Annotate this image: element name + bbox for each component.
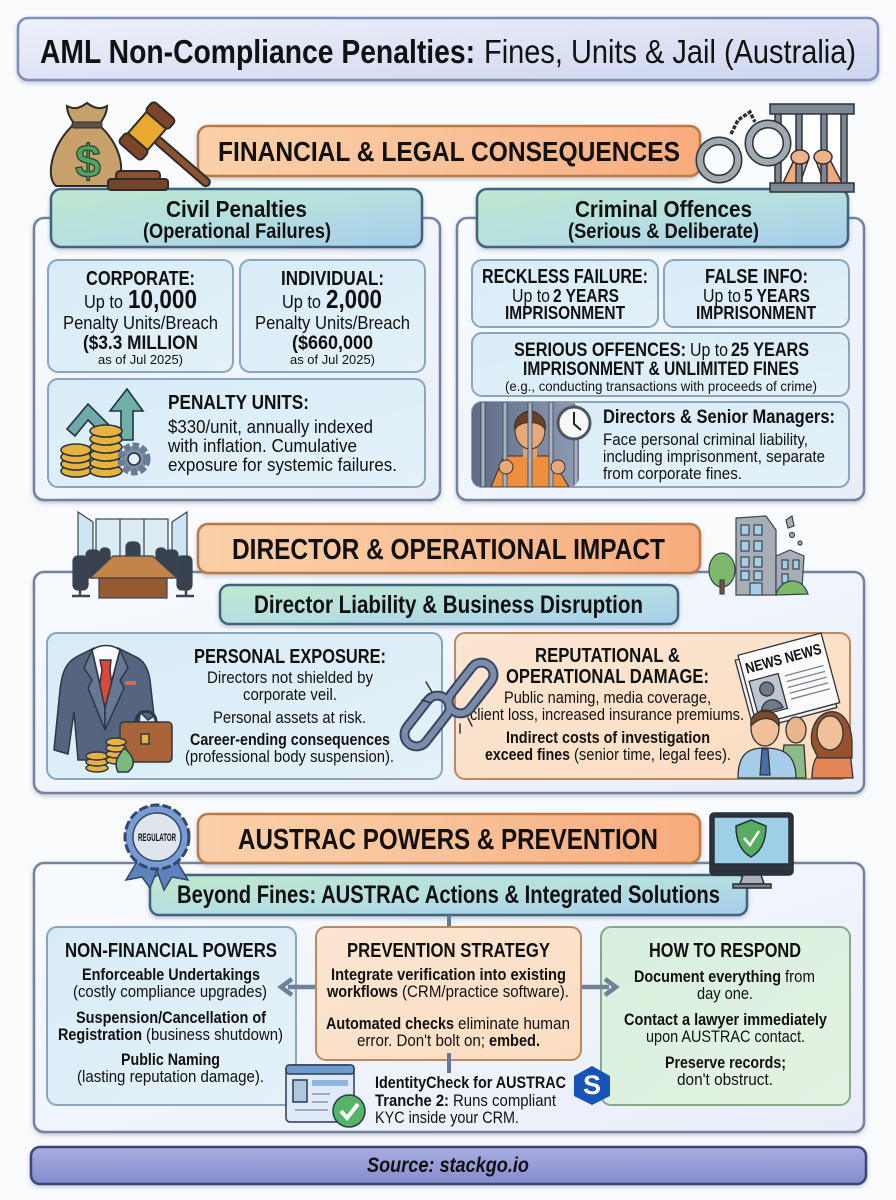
icon: monitor with shield bbox=[710, 813, 793, 888]
panel: civil penalties bbox=[34, 189, 440, 500]
card: corporate: Penalty Units/Breach bbox=[63, 313, 218, 333]
card: how to respond: from bbox=[785, 967, 815, 986]
card: personal exposure bbox=[47, 633, 442, 779]
card: corporate: ($3.3 MILLION bbox=[83, 333, 198, 354]
card: penalty units: with inflation. Cumulative bbox=[167, 436, 357, 456]
text: identitycheck callout: IdentityCheck for AUSTRAC bbox=[375, 1073, 566, 1092]
card: serious offences: SERIOUS OFFENCES: bbox=[514, 340, 686, 361]
connector: subheading to prevention strategy bbox=[447, 915, 451, 928]
card: penalty units: PENALTY UNITS: bbox=[168, 392, 309, 414]
card: prevention strategy: eliminate human bbox=[458, 1014, 570, 1033]
card: false info: FALSE INFO: bbox=[705, 266, 808, 288]
icon: stackgo logo: S bbox=[583, 1070, 601, 1100]
card: prevention strategy: embed. bbox=[489, 1031, 540, 1050]
card: prevention strategy: (CRM/practice software). bbox=[402, 982, 569, 1001]
card: corporate: CORPORATE: bbox=[86, 268, 195, 290]
arrow: prevention to how to respond bbox=[581, 979, 616, 995]
card: serious offences: 25 YEARS bbox=[731, 340, 809, 361]
section heading: financial and legal consequences: FINANCIAL & LEGAL CONSEQUENCES bbox=[218, 136, 680, 167]
card: false info: Up to bbox=[703, 286, 741, 306]
text: identitycheck callout bbox=[375, 1073, 566, 1127]
card: reputational and operational damage: Public naming, media coverage, bbox=[504, 688, 711, 707]
criminal offences header bbox=[477, 189, 848, 247]
card: reputational and operational damage: REPUTATIONAL & bbox=[535, 645, 680, 667]
card: false info: IMPRISONMENT bbox=[696, 303, 816, 323]
subheading: beyond fines: Beyond Fines: AUSTRAC Actions & Integrated Solutions bbox=[177, 881, 720, 909]
card: non-financial powers: NON-FINANCIAL POWERS bbox=[65, 940, 277, 962]
card: reckless failure bbox=[472, 260, 658, 327]
card: how to respond: HOW TO RESPOND bbox=[649, 940, 801, 962]
subheading: director liability: Director Liability & Business Disruption bbox=[254, 591, 643, 619]
card: personal exposure: (professional body suspension). bbox=[185, 747, 394, 766]
card: how to respond bbox=[601, 927, 850, 1105]
section heading: austrac powers and prevention: AUSTRAC POWERS & PREVENTION bbox=[238, 824, 658, 856]
card: prevention strategy: workflows bbox=[326, 982, 398, 1001]
card: prevention strategy: PREVENTION STRATEGY bbox=[347, 940, 551, 962]
card: personal exposure: Directors not shielded by bbox=[207, 668, 373, 687]
card: non-financial powers: Suspension/Cancellation of bbox=[76, 1008, 266, 1027]
card: personal exposure: PERSONAL EXPOSURE: bbox=[194, 646, 386, 668]
icon: money bag bbox=[51, 103, 121, 187]
section heading: financial and legal consequences bbox=[198, 126, 700, 176]
card: penalty units: exposure for systemic failures. bbox=[168, 455, 397, 475]
text: identitycheck callout: Runs compliant bbox=[453, 1091, 556, 1110]
card: corporate bbox=[48, 260, 233, 372]
card: non-financial powers bbox=[47, 927, 296, 1105]
panel: criminal offences bbox=[457, 189, 864, 500]
card: penalty units: $330/unit, annually indexed bbox=[168, 417, 373, 437]
icon: newspaper and worried people: NEWS NEWS bbox=[744, 641, 823, 677]
card: how to respond: Contact a lawyer immediately bbox=[624, 1010, 827, 1029]
panel: austrac powers and prevention bbox=[34, 863, 864, 1132]
panel: director and operational impact bbox=[34, 572, 864, 793]
card: prevention strategy bbox=[316, 927, 581, 1060]
icon: money bag: $ bbox=[75, 135, 101, 187]
card: personal exposure: Personal assets at risk. bbox=[213, 708, 366, 727]
footer: source bar: Source: stackgo.io bbox=[367, 1154, 529, 1177]
section heading: director and operational impact bbox=[198, 524, 700, 573]
connector: prevention strategy to identitycheck bbox=[447, 1053, 451, 1073]
card: personal exposure: Career-ending consequences bbox=[190, 730, 390, 749]
icon: handcuffs bbox=[700, 112, 787, 179]
card: false info bbox=[664, 260, 849, 327]
icon: boardroom bbox=[72, 512, 194, 598]
card: serious offences bbox=[472, 333, 849, 396]
card: serious offences: (e.g., conducting transactions with proceeds of crime) bbox=[505, 378, 817, 394]
icon: newspaper and worried people bbox=[734, 633, 853, 778]
icon: coins, arrows and gear bbox=[61, 389, 147, 477]
card: how to respond: Document everything bbox=[634, 967, 781, 986]
card: directors and senior managers bbox=[472, 402, 849, 487]
footer: source bar bbox=[31, 1147, 866, 1184]
card: reputational and operational damage: client loss, increased insurance premiums. bbox=[470, 705, 744, 724]
icon: damaged office building bbox=[709, 516, 808, 595]
title: Fines, Units & Jail (Australia) bbox=[484, 33, 856, 70]
icon: broken chain bbox=[400, 658, 498, 751]
card: penalty units bbox=[48, 379, 425, 487]
civil penalties header: (Operational Failures) bbox=[143, 220, 331, 243]
card: how to respond: day one. bbox=[697, 984, 753, 1003]
civil penalties header bbox=[51, 189, 422, 247]
criminal offences header: Criminal Offences bbox=[575, 196, 752, 222]
card: prevention strategy: Integrate verification into existing bbox=[331, 965, 566, 984]
card: non-financial powers: (costly compliance upgrades) bbox=[73, 982, 267, 1001]
title: AML Non-Compliance Penalties: bbox=[40, 33, 475, 70]
card: non-financial powers: (lasting reputation damage). bbox=[77, 1067, 264, 1086]
card: serious offences: IMPRISONMENT & UNLIMITED FINES bbox=[523, 359, 799, 380]
arrow: prevention to non-financial powers bbox=[281, 979, 316, 995]
card: non-financial powers: Enforceable Undertakings bbox=[82, 965, 260, 984]
icon: regulator rosette bbox=[125, 805, 189, 890]
card: false info: 5 YEARS bbox=[744, 286, 810, 306]
card: how to respond: upon AUSTRAC contact. bbox=[646, 1027, 805, 1046]
subheading: beyond fines bbox=[150, 875, 747, 915]
card: serious offences: Up to bbox=[690, 340, 728, 360]
card: reckless failure: 2 YEARS bbox=[553, 286, 619, 306]
card: reputational and operational damage: OPERATIONAL DAMAGE: bbox=[506, 666, 709, 688]
card: individual: Up to bbox=[282, 292, 321, 312]
card: individual: Penalty Units/Breach bbox=[255, 313, 410, 333]
card: reputational and operational damage bbox=[455, 633, 853, 779]
card: reputational and operational damage: exceed fines bbox=[485, 745, 570, 764]
icon: regulator rosette: REGULATOR bbox=[138, 832, 176, 844]
card: individual bbox=[240, 260, 425, 372]
card: individual: INDIVIDUAL: bbox=[281, 268, 384, 290]
civil penalties header: Civil Penalties bbox=[166, 196, 307, 222]
card: how to respond: Preserve records; bbox=[665, 1053, 786, 1072]
card: prevention strategy: error. Don't bolt on; bbox=[357, 1031, 485, 1050]
card: corporate: Up to bbox=[84, 292, 123, 312]
card: reputational and operational damage: Indirect costs of investigation bbox=[506, 728, 710, 747]
text: identitycheck callout: Tranche 2: bbox=[375, 1091, 449, 1110]
card: directors and senior managers: including imprisonment, separate bbox=[603, 447, 825, 466]
card: individual: ($660,000 bbox=[292, 333, 373, 354]
section heading: director and operational impact: DIRECTOR & OPERATIONAL IMPACT bbox=[232, 534, 665, 566]
icon: jail bars with hands bbox=[770, 104, 854, 192]
icon: suit, briefcase and coins bbox=[54, 646, 172, 772]
card: directors and senior managers: Face personal criminal liability, bbox=[603, 430, 808, 449]
card: reckless failure: RECKLESS FAILURE: bbox=[482, 266, 648, 288]
card: personal exposure: corporate veil. bbox=[243, 685, 337, 704]
card: reputational and operational damage: (senior time, legal fees). bbox=[574, 745, 731, 764]
card: corporate: 10,000 bbox=[128, 284, 197, 314]
card: prevention strategy: Automated checks bbox=[326, 1014, 454, 1033]
card: how to respond: don't obstruct. bbox=[677, 1070, 773, 1089]
section heading: austrac powers and prevention bbox=[198, 814, 700, 863]
card: individual: 2,000 bbox=[326, 284, 382, 314]
card: individual: as of Jul 2025) bbox=[290, 352, 375, 367]
card: non-financial powers: (business shutdown) bbox=[146, 1025, 283, 1044]
text: identitycheck callout: KYC inside your CRM. bbox=[375, 1108, 519, 1127]
card: directors and senior managers: from corporate fines. bbox=[603, 464, 742, 483]
criminal offences header: (Serious & Deliberate) bbox=[568, 220, 759, 243]
card: non-financial powers: Registration bbox=[58, 1025, 142, 1044]
subheading: director liability bbox=[220, 585, 678, 624]
icon: stackgo logo bbox=[574, 1066, 610, 1105]
icon: prisoner behind bars bbox=[472, 402, 590, 487]
icon: verification window with check bbox=[286, 1065, 365, 1127]
card: directors and senior managers: Directors & Senior Managers: bbox=[603, 407, 835, 428]
icon: gavel bbox=[108, 101, 227, 205]
card: non-financial powers: Public Naming bbox=[121, 1050, 220, 1069]
title bbox=[18, 18, 878, 80]
card: reckless failure: Up to bbox=[512, 286, 550, 306]
card: reckless failure: IMPRISONMENT bbox=[505, 303, 625, 323]
card: corporate: as of Jul 2025) bbox=[98, 352, 183, 367]
